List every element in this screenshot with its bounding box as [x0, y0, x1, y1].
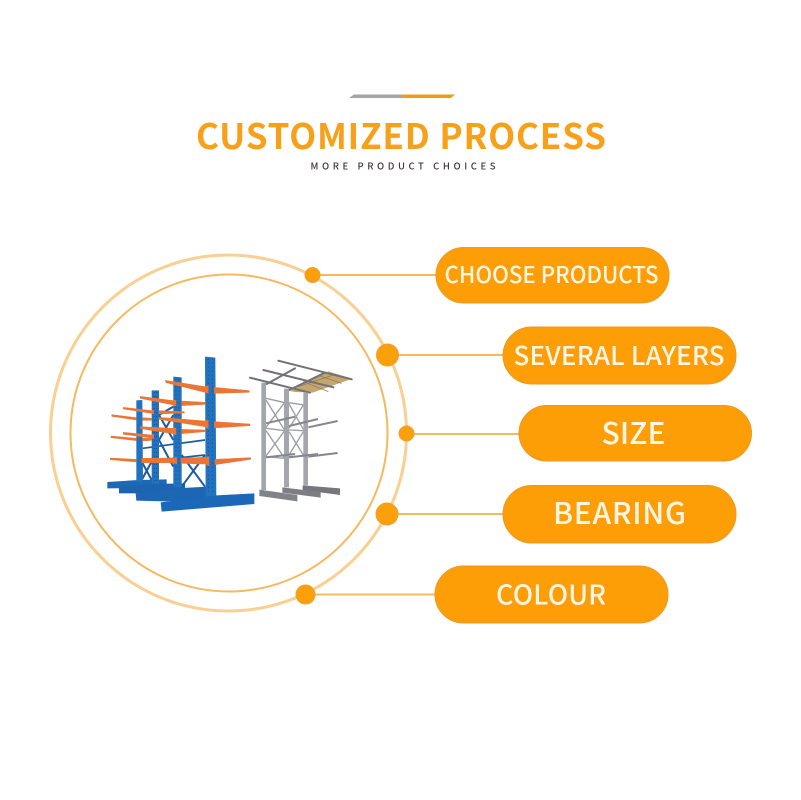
callout 2: several layers: [376, 327, 736, 384]
uprights: [136, 357, 216, 497]
cross braces: [142, 407, 205, 487]
bases: [259, 485, 340, 501]
header accent bar: [349, 94, 455, 98]
uprights: [261, 383, 308, 490]
callout 1: choose products: CHOOSE PRODUCTS: [444, 256, 658, 290]
illustration: blue cantilever rack: [107, 357, 254, 512]
outer ring: [50, 255, 406, 611]
callout 5: colour: [296, 566, 668, 623]
rear bases: [107, 479, 167, 488]
callout 3: size: SIZE: [602, 409, 666, 453]
callout 5: colour: COLOUR: [496, 574, 606, 612]
upright perforations: [154, 359, 213, 494]
callout 4: bearing: [376, 486, 736, 543]
callout 2: several layers: SEVERAL LAYERS: [514, 336, 724, 373]
top wood deck: [290, 371, 352, 393]
title: CUSTOMIZED PROCESS: [196, 109, 606, 160]
illustration: gray cantilever rack: [250, 361, 352, 501]
inner ring: [70, 274, 388, 592]
callout 3: size: [399, 406, 752, 461]
side arms: [266, 417, 338, 457]
subtitle: MORE PRODUCT CHOICES: [310, 158, 496, 172]
orange arms: [110, 380, 251, 466]
callout 1: choose products: [305, 248, 669, 303]
front base: [161, 493, 254, 512]
top arms: [250, 361, 352, 393]
callout 4: bearing: BEARING: [553, 489, 686, 533]
braces: [266, 398, 304, 458]
